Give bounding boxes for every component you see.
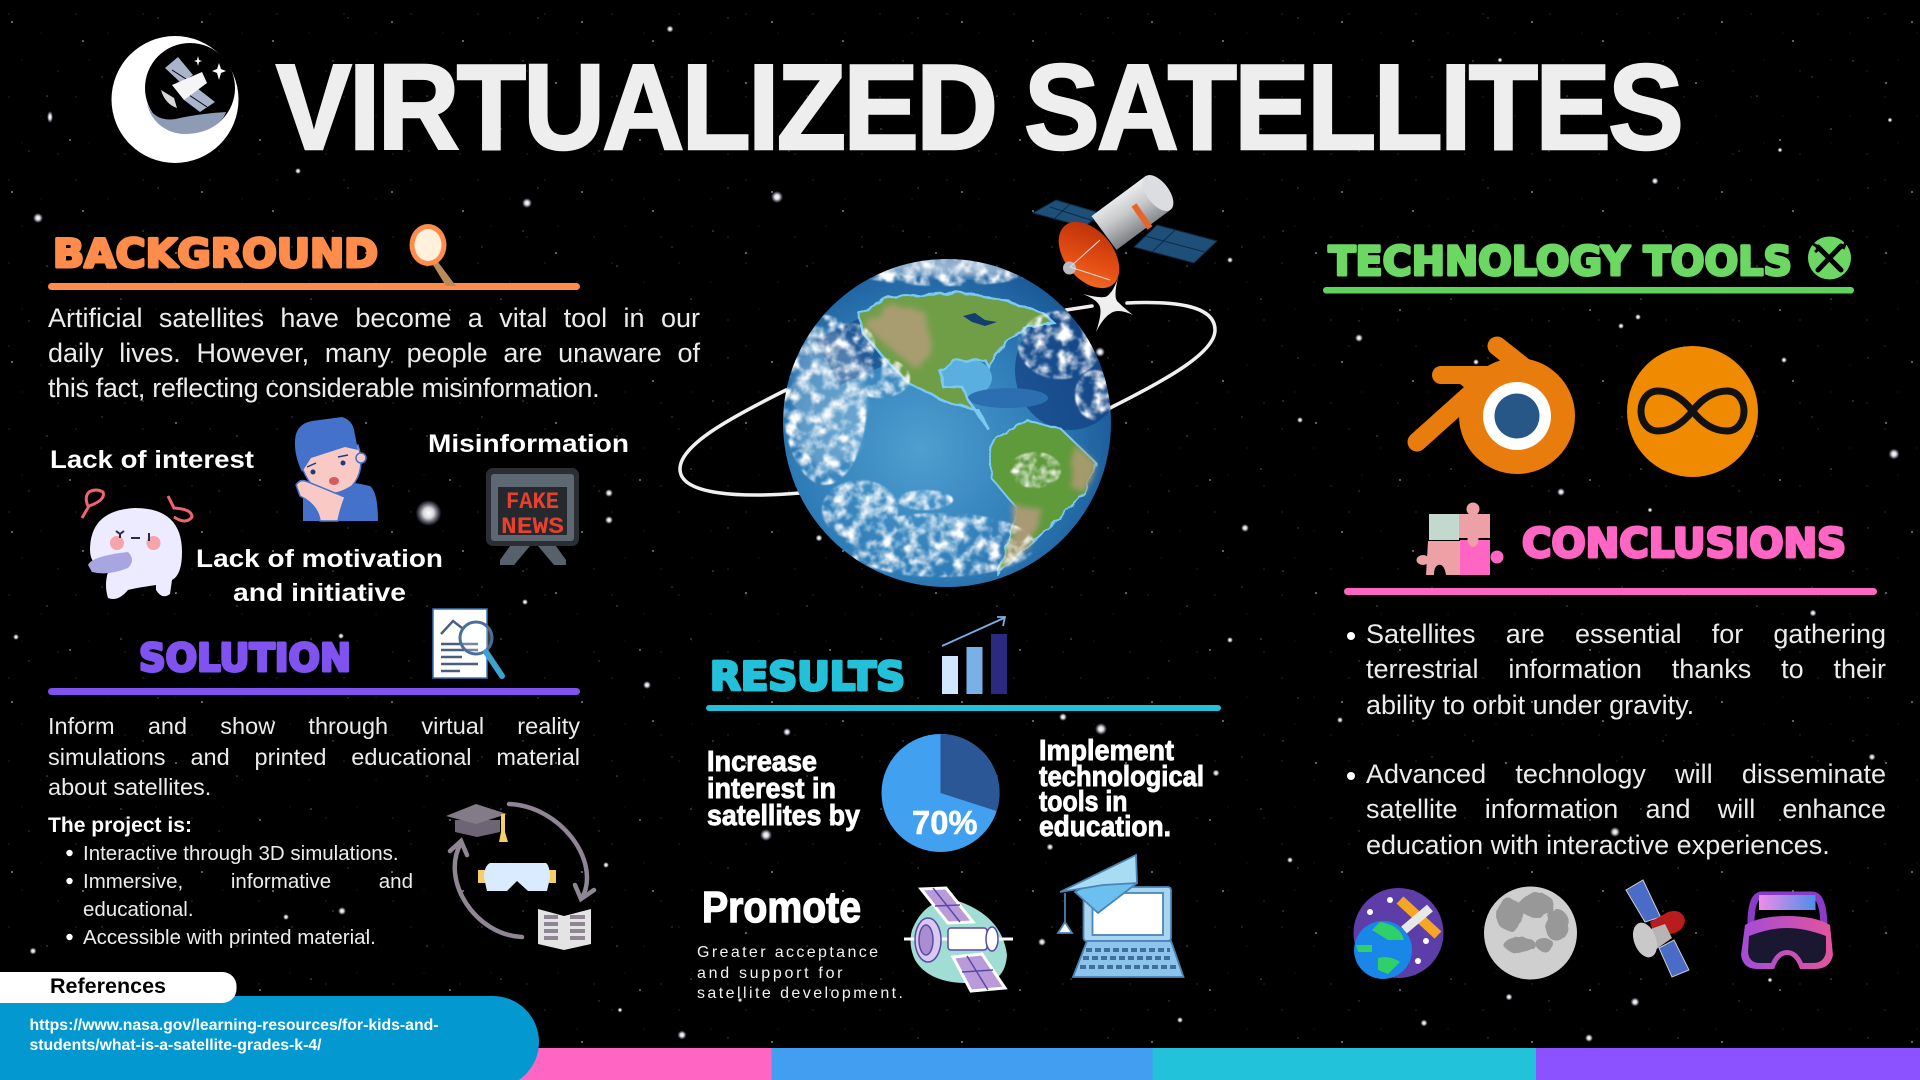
gulf and caribbean (942, 360, 992, 398)
pie chart 70% (882, 734, 1000, 852)
text: increase interest (707, 746, 860, 832)
text: greater acceptance: and support for (697, 965, 843, 982)
icon: rising bar chart (942, 617, 1007, 694)
label: misinformation: Misinformation (428, 430, 629, 458)
icon: moon (1484, 886, 1577, 980)
heading: results (706, 655, 1221, 711)
label: lack of motivation and initiative: and initiative (233, 579, 406, 607)
icon: fake news tv: FAKE (506, 489, 559, 515)
dark atlantic and pacific water (1015, 310, 1110, 430)
icon: infinity logo (1627, 346, 1758, 477)
text: conclusion one (1366, 619, 1886, 720)
text: solution paragraph (48, 713, 580, 800)
icon: earth with satellite (1354, 888, 1444, 979)
north america (859, 293, 1054, 430)
text: solution paragraph: Inform and show through virtual reality (48, 713, 580, 739)
heading: background (48, 232, 580, 290)
mortarboard cap (446, 804, 508, 842)
references block: https://www.nasa.gov/learning-resources/for-kids-and- (30, 1017, 438, 1034)
open book (538, 909, 591, 950)
text: conclusion one: ability to orbit under gravity. (1366, 690, 1694, 720)
text: implement technological tools: education. (1039, 811, 1171, 843)
text: increase interest: interest in (707, 773, 836, 805)
clouds (783, 250, 1115, 577)
heading: conclusions (1344, 521, 1877, 595)
text: project bullets: educational. (83, 898, 194, 921)
text: solution paragraph: simulations and printed educational material (48, 744, 580, 770)
text: solution paragraph: about satellites. (48, 774, 211, 800)
text: background paragraph: this fact, reflecting considerable misinformation. (48, 373, 599, 403)
heading: results: RESULTS (710, 655, 905, 700)
text: conclusion two: education with interactive experiences. (1366, 830, 1830, 860)
icon: confused ghost (82, 490, 192, 599)
icon: satellite with red body (1626, 880, 1689, 977)
pie chart 70%: 70% (912, 804, 978, 841)
text: implement technological tools (1039, 735, 1204, 843)
icon: crossed tools (1808, 236, 1851, 280)
heading: background: BACKGROUND (53, 232, 378, 277)
icon: fake news tv (486, 468, 579, 565)
heading: conclusions: CONCLUSIONS (1522, 521, 1846, 567)
text: greater acceptance (697, 944, 903, 1002)
label: lack of interest: Lack of interest (50, 446, 255, 474)
text: increase interest: satellites by (707, 800, 860, 832)
icon: bored person (295, 417, 378, 521)
icon: learning cycle (446, 804, 594, 950)
icon: orange dish satellite (1033, 170, 1217, 300)
text: greater acceptance: Greater acceptance (697, 944, 878, 961)
text: project bullets: Accessible with printed material. (83, 926, 376, 949)
title: VIRTUALIZED SATELLITES (276, 39, 1681, 175)
text: the project is: The project is: (48, 814, 192, 837)
text: conclusion one: terrestrial information thanks to their (1366, 654, 1886, 684)
text: project bullets: Interactive through 3D simulations. (83, 842, 399, 865)
heading: technology tools: TECHNOLOGY TOOLS (1328, 239, 1792, 285)
heading: solution (48, 636, 580, 695)
text: conclusion two: satellite information and will enhance (1366, 794, 1886, 824)
icon: puzzle pieces (1416, 502, 1504, 575)
icon: blender logo (1417, 337, 1575, 474)
text: implement technological tools: tools in (1039, 786, 1128, 818)
text: implement technological tools: Implement (1039, 735, 1174, 767)
bullet dots: conclusions (1347, 632, 1355, 780)
text: background paragraph (48, 303, 700, 403)
logo satellite (161, 56, 226, 112)
bullet dots: project list (66, 850, 73, 940)
references block: References (50, 975, 166, 998)
icon: laptop with graduation cap (1058, 855, 1184, 977)
vr goggles (478, 863, 556, 891)
bottom colour bar (510, 1048, 1920, 1080)
text: conclusion one: Satellites are essential for gathering (1366, 619, 1886, 649)
icon: crescent moon logo (112, 36, 238, 163)
earth globe (783, 250, 1125, 587)
label: lack of motivation and initiative (196, 545, 443, 607)
text: promote: Promote (702, 883, 861, 932)
south america (989, 420, 1096, 575)
text: project bullets: Immersive, informative and (83, 870, 413, 893)
icon: purple satellite on teal blob (904, 888, 1013, 991)
icon: fake news tv: NEWS (501, 514, 564, 540)
logo hand (147, 103, 226, 134)
text: increase interest: Increase (707, 746, 817, 778)
text: background paragraph: Artificial satellites have become a vital tool in our (48, 303, 700, 333)
text: greater acceptance: satellite development. (697, 985, 903, 1002)
text: conclusion two (1366, 759, 1886, 860)
great lakes (963, 313, 997, 326)
text: conclusion two: Advanced technology will disseminate (1366, 759, 1886, 789)
text: background paragraph: daily lives. However, many people are unaware of (48, 338, 700, 368)
references block (0, 972, 539, 1080)
references block: students/what-is-a-satellite-grades-k-4/ (30, 1037, 322, 1054)
icon: sparkle on orbit (1083, 278, 1133, 332)
orbit ring (680, 302, 1215, 495)
heading: solution: SOLUTION (139, 636, 351, 680)
text: project bullets (83, 842, 413, 949)
text: implement technological tools: technological (1039, 761, 1204, 793)
icon: document with magnifier (433, 609, 502, 678)
icon: vr headset (1741, 895, 1833, 969)
label: lack of motivation and initiative: Lack of motivation (196, 545, 443, 573)
icon: magnifying glass (410, 224, 456, 286)
